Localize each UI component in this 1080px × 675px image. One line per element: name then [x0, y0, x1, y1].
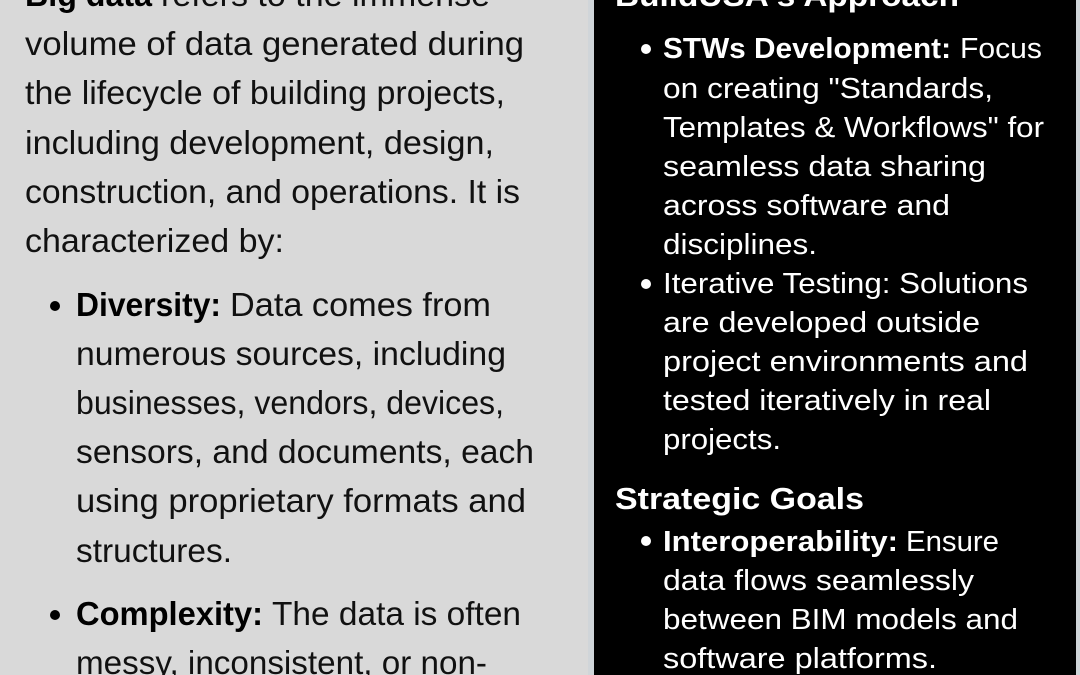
- bullet: interoperability: Interoperability:: [663, 526, 898, 558]
- bullet: interoperability: between BIM models and: [663, 604, 1018, 636]
- bullet: complexity: [50, 595, 521, 675]
- bullet: interoperability: Ensure: [906, 526, 999, 558]
- heading: strategic goals: Strategic Goals: [615, 481, 864, 516]
- bullet: STWs development: disciplines.: [663, 229, 817, 261]
- bullet: iterative testing: project environments and: [663, 346, 1028, 378]
- bullet: complexity: The data is often: [272, 595, 521, 632]
- panel: what big data is: [0, 0, 594, 675]
- bullet: interoperability: data flows seamlessly: [663, 565, 975, 597]
- bullet: iterative testing: Iterative Testing: Solutions: [663, 268, 1028, 300]
- bullet: STWs development: [641, 33, 1045, 261]
- bullet: diversity: [50, 286, 534, 569]
- text block: big data definition: characterized by:: [25, 222, 284, 259]
- bullet: STWs development: STWs Development:: [663, 33, 951, 65]
- bullet: diversity: structures.: [76, 532, 232, 569]
- bullet: STWs development: Templates & Workflows" for: [663, 112, 1045, 144]
- bullet: iterative testing: are developed outside: [663, 307, 980, 339]
- bullet: diversity: Diversity:: [76, 286, 221, 323]
- text block: big data definition: construction, and operations. It is: [25, 173, 520, 210]
- bullet: diversity: numerous sources, including: [76, 335, 506, 372]
- bullet: complexity: Complexity:: [76, 595, 263, 632]
- text block: big data definition: the lifecycle of building projects,: [25, 74, 505, 111]
- bullet: diversity: businesses, vendors, devices,: [76, 384, 504, 421]
- bullet: STWs development: seamless data sharing: [663, 151, 986, 183]
- bullet: STWs development: across software and: [663, 190, 950, 222]
- text block: big data definition: volume of data generated during: [25, 25, 524, 62]
- bullet: diversity: sensors, and documents, each: [76, 433, 534, 470]
- text block: big data definition: [25, 0, 524, 259]
- bullet: iterative testing: projects.: [663, 424, 781, 456]
- bullet: STWs development: Focus: [960, 33, 1042, 65]
- bullet: STWs development: on creating "Standards,: [663, 73, 993, 105]
- bullet: iterative testing: tested iteratively in real: [663, 385, 991, 417]
- bullet: diversity: using proprietary formats and: [76, 482, 526, 519]
- panel: approach and goals: [594, 0, 1080, 675]
- bullet: iterative testing: [641, 268, 1028, 456]
- bullet: diversity: Data comes from: [230, 286, 491, 323]
- bullet: interoperability: software platforms.: [663, 643, 937, 675]
- text block: big data definition: including development, design,: [25, 124, 494, 161]
- bullet: interoperability: [641, 526, 1018, 675]
